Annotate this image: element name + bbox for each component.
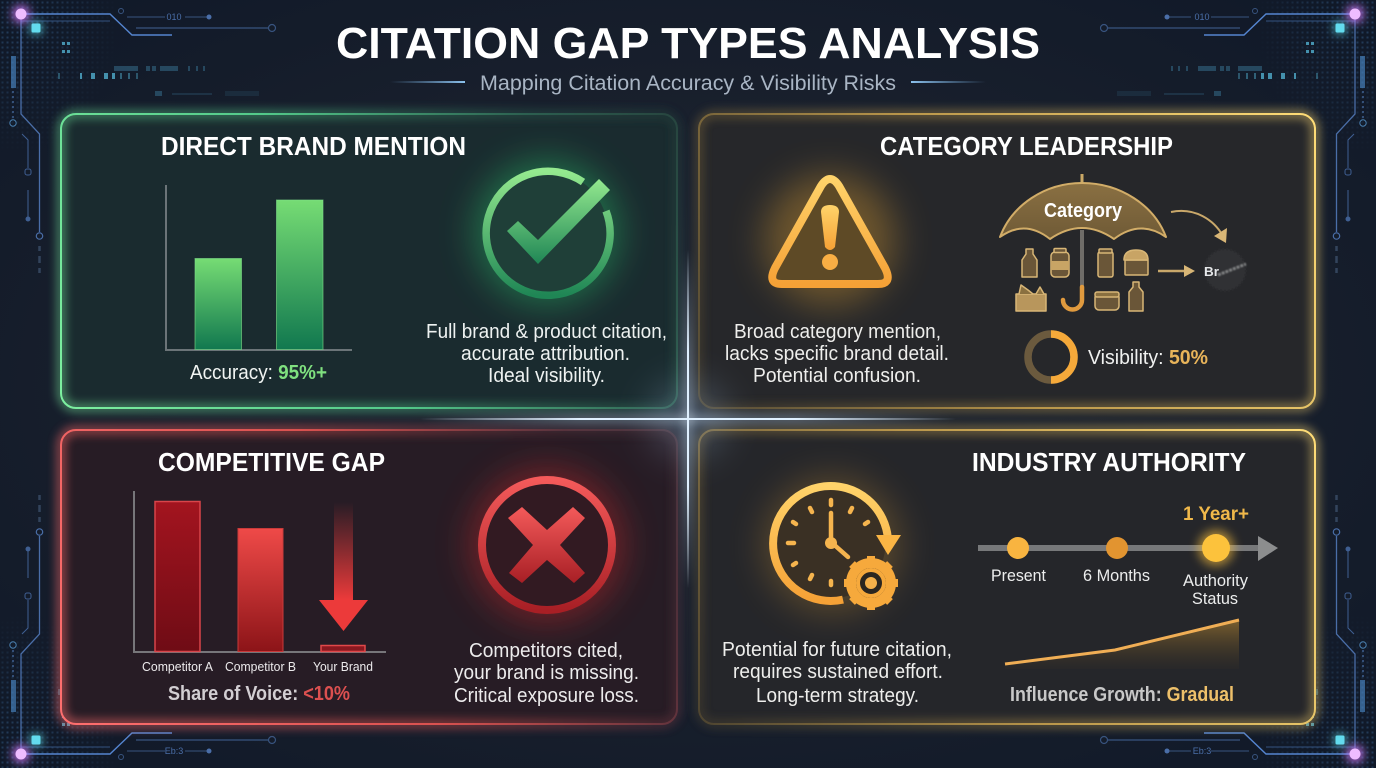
- description: [426, 321, 667, 387]
- stat: accuracy: Accuracy: 95%+: [190, 362, 327, 384]
- description: requires sustained effort.: [733, 661, 943, 683]
- faded brand badge: Br: [1204, 264, 1219, 279]
- circuit decoration: bottom left: [10, 495, 276, 762]
- circuit decoration: top left: 010: [166, 12, 182, 22]
- description: lacks specific brand detail.: [725, 343, 949, 365]
- circuit decoration: top right: [1100, 6, 1366, 273]
- description: Competitors cited,: [469, 640, 623, 662]
- description: Full brand & product citation,: [426, 321, 667, 343]
- circuit decoration: top right: 010: [1194, 12, 1210, 22]
- timeline labels: Status: [1192, 590, 1238, 608]
- description: [454, 640, 639, 707]
- description: accurate attribution.: [461, 343, 630, 365]
- icon: warning triangle: [764, 174, 896, 306]
- circuit decoration: top left: [10, 6, 276, 273]
- panel: competitive gap: [61, 430, 677, 724]
- donut chart: visibility: [1028, 334, 1074, 380]
- panel: category leadership: [699, 114, 1315, 408]
- icon: cross: [471, 469, 623, 621]
- description: your brand is missing.: [454, 662, 639, 684]
- circuit decoration: bottom right: [1100, 495, 1366, 762]
- stat: share of voice: Share of Voice: <10%: [168, 683, 350, 705]
- description: Ideal visibility.: [488, 365, 605, 387]
- title: CITATION GAP TYPES ANALYSIS: [336, 19, 1040, 68]
- description: Broad category mention,: [734, 321, 941, 343]
- description: Critical exposure loss.: [454, 685, 639, 707]
- panel: direct brand mention: [61, 114, 677, 408]
- product icons: [1016, 248, 1148, 311]
- description: Long-term strategy.: [756, 685, 919, 707]
- stat: visibility: Visibility: 50%: [1088, 347, 1208, 369]
- bar labels: Competitor B: [225, 659, 296, 674]
- icon: check mark: [475, 160, 619, 304]
- arrow to brand: [1158, 211, 1227, 277]
- label: category: Category: [1044, 200, 1123, 222]
- heading: COMPETITIVE GAP: [158, 447, 385, 477]
- timeline labels: Present: [991, 567, 1046, 585]
- heading: DIRECT BRAND MENTION: [161, 131, 466, 161]
- arrow: downward: [319, 502, 368, 631]
- bar chart: share of voice: [134, 491, 386, 674]
- panel: industry authority: [699, 430, 1315, 724]
- illustration: category umbrella: [1000, 174, 1246, 311]
- faded brand badge: [1204, 249, 1246, 291]
- bar labels: [142, 659, 373, 674]
- bar labels: Your Brand: [313, 659, 373, 674]
- timeline labels: Authority: [1183, 572, 1249, 590]
- circuit decoration: bottom right: Eb:3: [1193, 746, 1211, 756]
- stat: influence growth: Influence Growth: Gradual: [1010, 684, 1234, 706]
- area chart: influence growth: [1005, 620, 1239, 669]
- description: [725, 321, 949, 387]
- bar labels: Competitor A: [142, 659, 213, 674]
- icon: clock with gear: [764, 477, 901, 613]
- center cross divider: [420, 250, 956, 588]
- timeline labels: 6 Months: [1083, 567, 1150, 585]
- heading: INDUSTRY AUTHORITY: [972, 447, 1246, 477]
- milestone label: 1 Year+: [1183, 504, 1249, 525]
- timeline: [978, 504, 1278, 608]
- circuit decoration: bottom left: Eb:3: [165, 746, 183, 756]
- gear: [844, 556, 898, 610]
- description: Potential for future citation,: [722, 639, 952, 661]
- description: [722, 639, 952, 707]
- bar chart: accuracy: [166, 185, 352, 350]
- subtitle: Mapping Citation Accuracy & Visibility Risks: [480, 72, 896, 95]
- timeline labels: [991, 567, 1249, 608]
- description: Potential confusion.: [753, 365, 921, 387]
- heading: CATEGORY LEADERSHIP: [880, 131, 1173, 161]
